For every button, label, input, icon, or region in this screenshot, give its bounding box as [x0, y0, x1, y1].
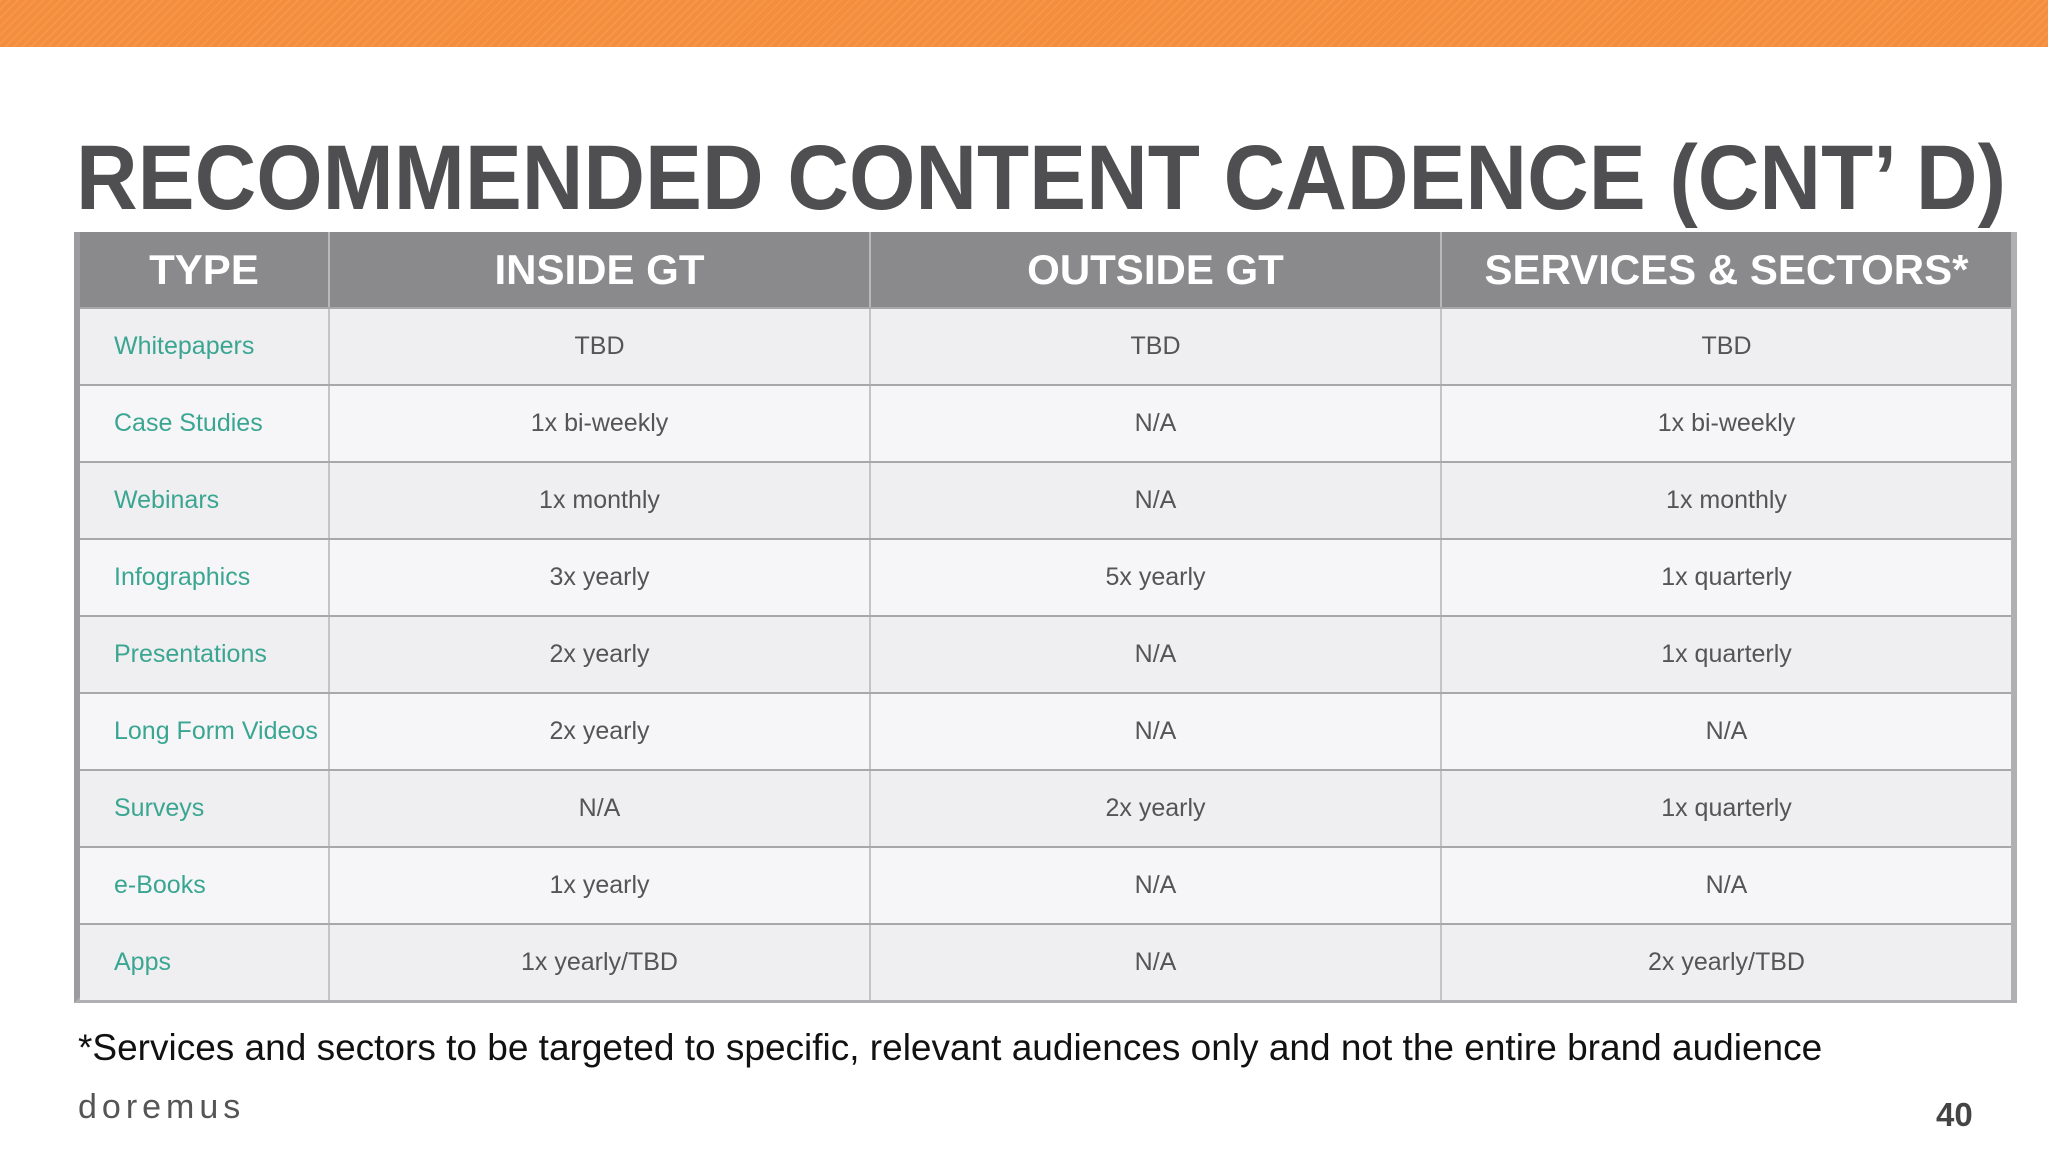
row: Long Form Videos: Long Form Videos	[114, 717, 318, 745]
row: Webinars: N/A	[1135, 486, 1176, 514]
row: Apps: N/A	[1135, 948, 1176, 976]
row: Whitepapers	[80, 307, 2011, 384]
table header: TYPE	[149, 246, 259, 292]
row: Surveys: N/A	[579, 794, 620, 822]
row: Webinars: 1x monthly	[1666, 486, 1787, 514]
logo: doremus: doremus	[78, 1088, 245, 1126]
row: Webinars	[80, 461, 2011, 538]
row: Surveys: Surveys	[114, 794, 204, 822]
row: Apps	[80, 923, 2011, 1000]
table	[74, 232, 2017, 1003]
row: Apps: 1x yearly/TBD	[521, 948, 678, 976]
row: Whitepapers: TBD	[1130, 332, 1180, 360]
row: e-Books: 1x yearly	[549, 871, 650, 899]
row: Case Studies: 1x bi-weekly	[1658, 409, 1795, 437]
row: Whitepapers: TBD	[574, 332, 624, 360]
row: Long Form Videos: N/A	[1135, 717, 1176, 745]
row: Case Studies	[80, 384, 2011, 461]
row: e-Books: N/A	[1135, 871, 1176, 899]
row: Webinars: 1x monthly	[539, 486, 660, 514]
row: Infographics: 5x yearly	[1105, 563, 1206, 591]
row: Infographics: 1x quarterly	[1661, 563, 1792, 591]
page number: 40	[1936, 1096, 1973, 1133]
row: Presentations: 1x quarterly	[1661, 640, 1792, 668]
row: Long Form Videos	[80, 692, 2011, 769]
row: Webinars: Webinars	[114, 486, 219, 514]
row: Infographics	[80, 538, 2011, 615]
row: e-Books: N/A	[1706, 871, 1747, 899]
row: Infographics: Infographics	[114, 563, 250, 591]
row: e-Books: e-Books	[114, 871, 206, 899]
row: Surveys: 2x yearly	[1105, 794, 1206, 822]
table header: OUTSIDE GT	[1027, 246, 1284, 292]
row: Long Form Videos: N/A	[1706, 717, 1747, 745]
row: Presentations: N/A	[1135, 640, 1176, 668]
table header: SERVICES & SECTORS*	[1485, 246, 1968, 292]
row: Whitepapers: Whitepapers	[114, 332, 254, 360]
row: Presentations: Presentations	[114, 640, 267, 668]
row: Surveys	[80, 769, 2011, 846]
row: Apps: Apps	[114, 948, 171, 976]
table header: INSIDE GT	[494, 246, 705, 292]
row: Surveys: 1x quarterly	[1661, 794, 1792, 822]
footnote: *Services and sectors to be targeted to specific, relevant audiences only and not the entire brand audience	[78, 1027, 1822, 1068]
row: Apps: 2x yearly/TBD	[1648, 948, 1805, 976]
row: Presentations	[80, 615, 2011, 692]
row: Presentations: 2x yearly	[549, 640, 650, 668]
row: Case Studies: 1x bi-weekly	[531, 409, 668, 437]
row: Case Studies: N/A	[1135, 409, 1176, 437]
row: Infographics: 3x yearly	[549, 563, 650, 591]
row: Long Form Videos: 2x yearly	[549, 717, 650, 745]
row: Whitepapers: TBD	[1702, 332, 1752, 360]
row: e-Books	[80, 846, 2011, 923]
table header	[80, 232, 2011, 307]
header band	[0, 0, 2048, 47]
row: Case Studies: Case Studies	[114, 409, 263, 437]
